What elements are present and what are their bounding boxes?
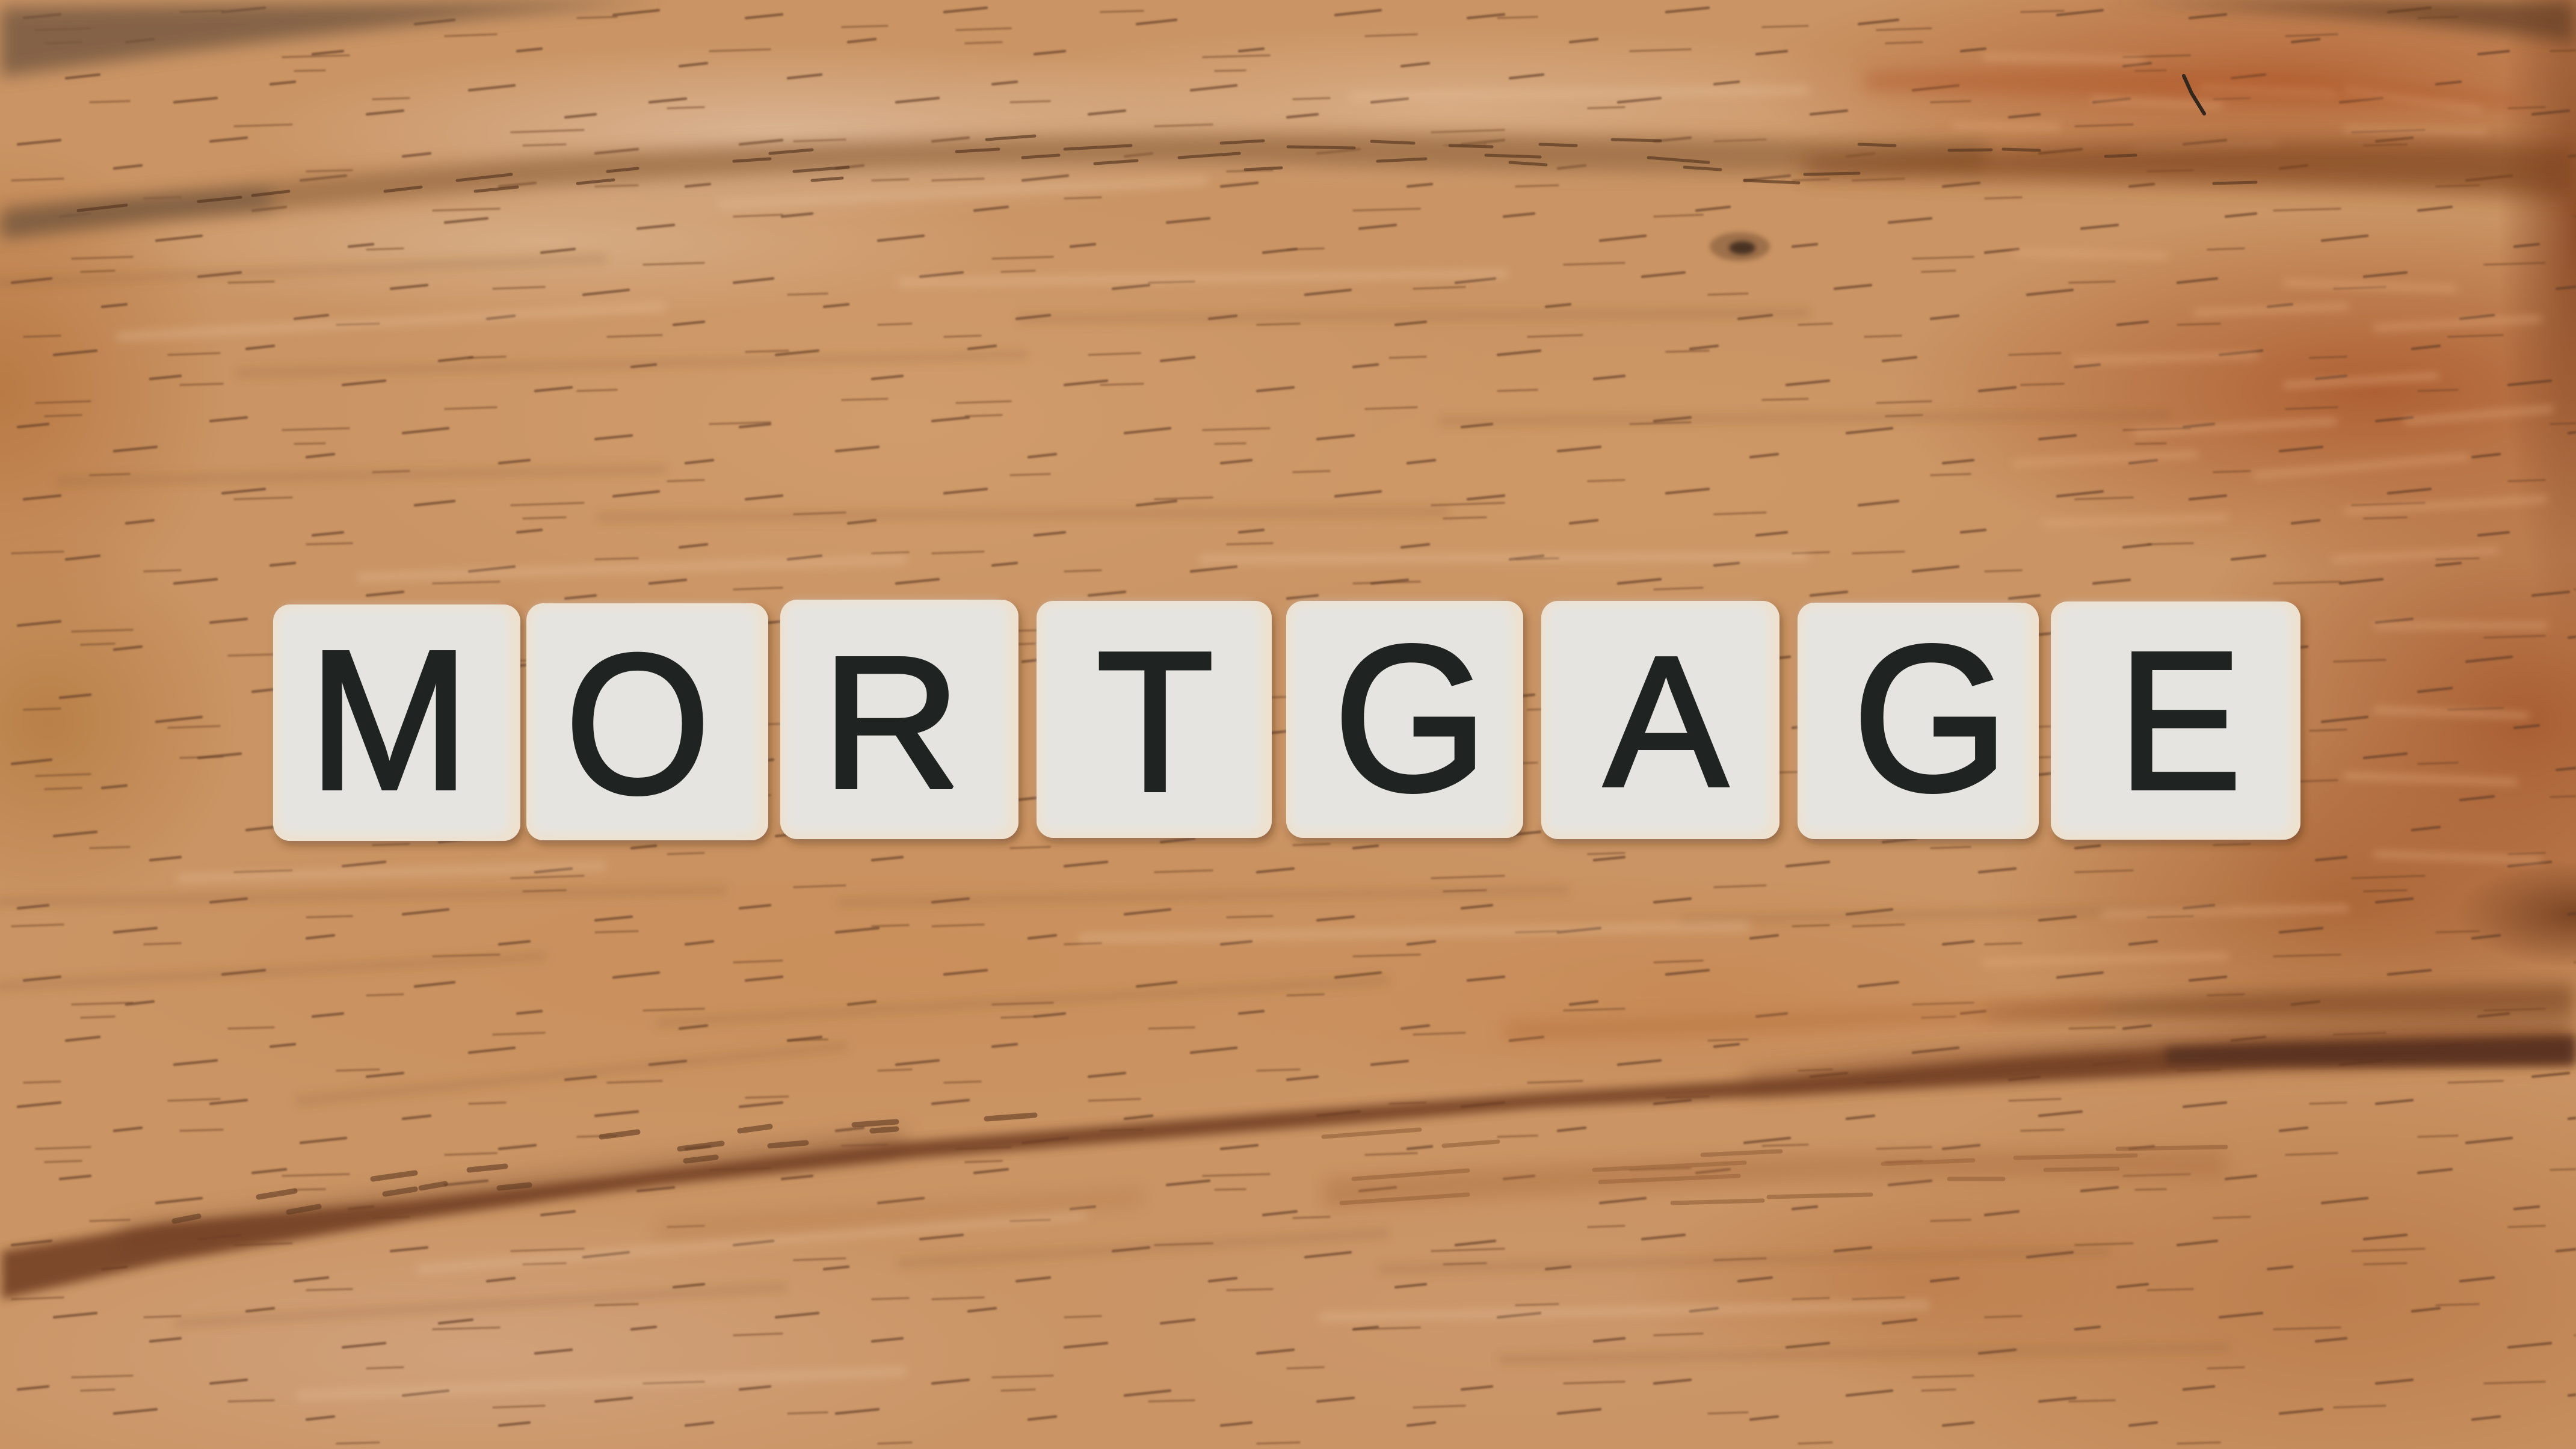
dark pore clusters in the upper band: [78, 136, 2256, 211]
letter M: M: [308, 610, 470, 831]
tile R: [780, 600, 1018, 839]
upper dark wood band: [2, 134, 2575, 238]
small dark mark: [2184, 76, 2204, 114]
top dark edge of the wood: [0, 1, 2575, 77]
letter O: O: [565, 613, 710, 835]
main dark wood streak: [2, 1020, 2575, 1299]
letter G: G: [1333, 602, 1488, 834]
letter T: T: [1096, 610, 1214, 832]
letter E: E: [2118, 611, 2242, 831]
tile M: [273, 605, 520, 841]
orange wood band top right: [1865, 70, 2527, 108]
letter R: R: [822, 618, 961, 828]
tile O: [526, 603, 768, 840]
tile G: [1286, 601, 1523, 838]
tile G: [1798, 603, 2039, 839]
dark pore clusters around the main streak: [174, 1115, 2226, 1221]
tile E: [2051, 601, 2300, 840]
wood knot: [1710, 232, 1770, 261]
letter G: G: [1852, 603, 2009, 835]
secondary dark bands lower right: [656, 983, 2575, 1239]
word built from letter tiles: [273, 600, 2300, 841]
tile A: [1541, 601, 1779, 839]
letter A: A: [1604, 618, 1728, 825]
tile T: [1037, 601, 1272, 838]
